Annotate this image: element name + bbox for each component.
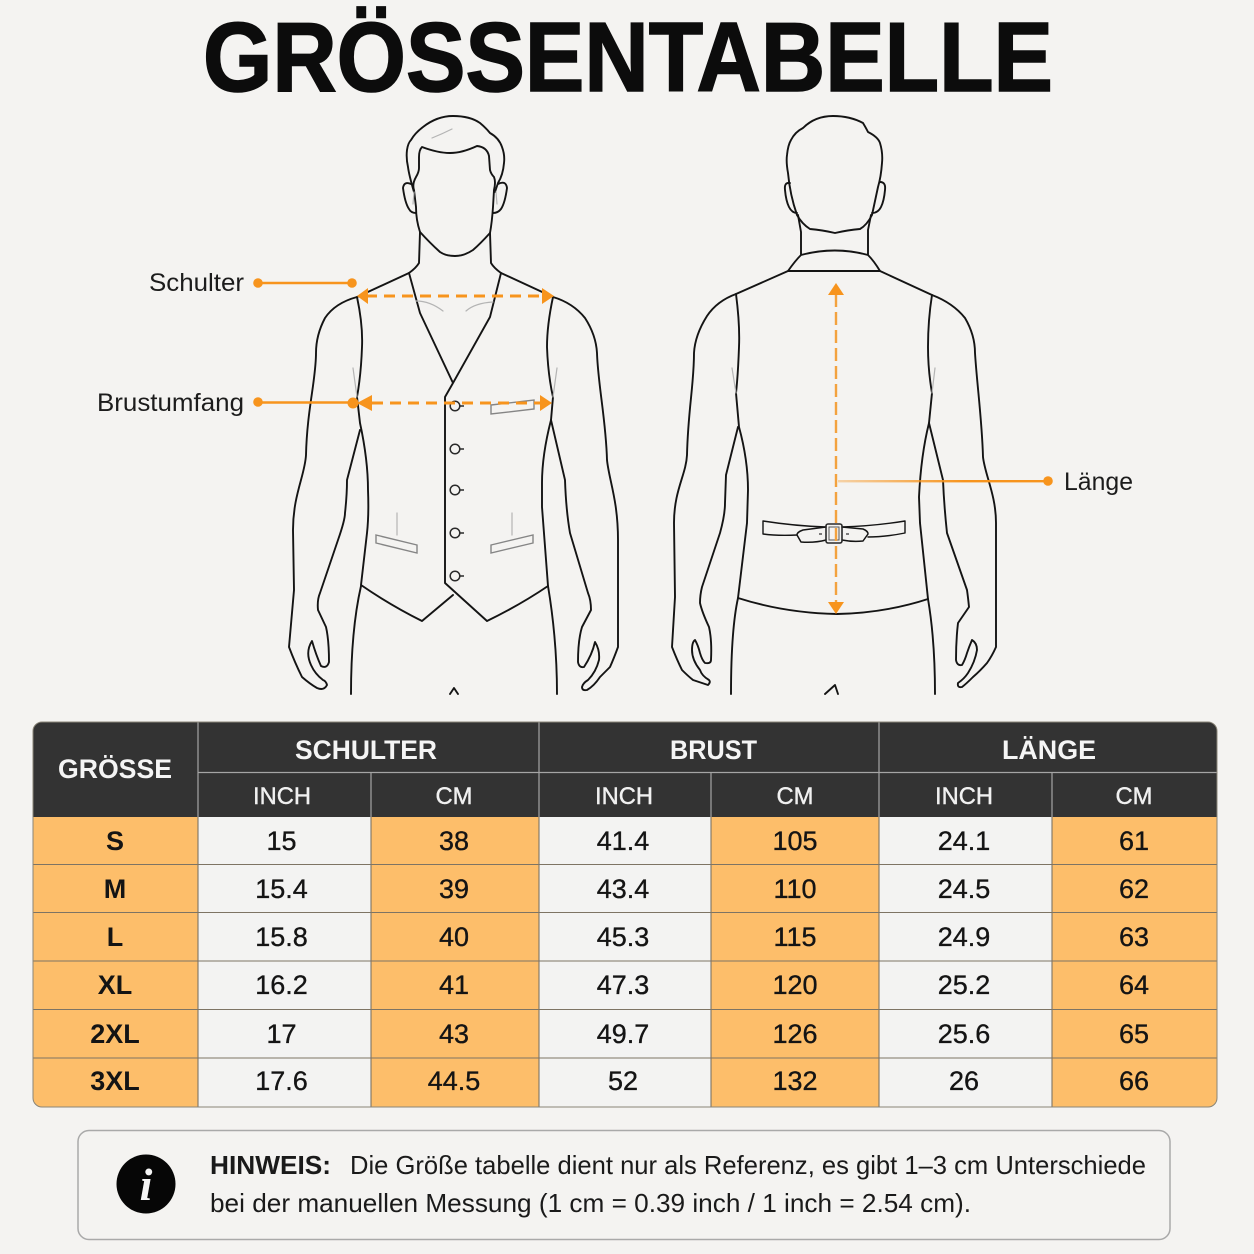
row M: M (104, 874, 126, 904)
table header: CM (436, 783, 472, 810)
vest outline (357, 273, 553, 621)
ears (403, 183, 507, 213)
face outline (413, 146, 495, 256)
collar creases (353, 301, 557, 535)
row S: 105 (772, 826, 818, 856)
row 2XL: 2XL (90, 1019, 140, 1049)
row XL (98, 975, 1148, 994)
table header: GRÖSSE (58, 754, 172, 784)
back of head (787, 116, 882, 233)
row L: L (107, 922, 123, 952)
row S: 61 (1119, 826, 1149, 856)
row L: 63 (1119, 922, 1149, 952)
icon: info (116, 1154, 176, 1214)
size table (33, 722, 1217, 1107)
row L: 40 (439, 922, 469, 952)
label: Brustumfang: Brustumfang (97, 389, 244, 417)
row 2XL: 25.6 (938, 1019, 990, 1049)
arrow: length (828, 283, 844, 614)
table cell backgrounds (33, 817, 1217, 1107)
table header: SCHULTER (295, 735, 437, 765)
table header (33, 722, 1217, 817)
hair details (413, 129, 497, 204)
row 2XL (91, 1024, 1148, 1044)
row 3XL: 3XL (90, 1066, 140, 1096)
back right arm (880, 271, 996, 687)
label: Länge: Länge (1064, 468, 1133, 496)
right arm (501, 273, 618, 690)
row XL: 120 (772, 970, 818, 1000)
table header: CM (776, 783, 814, 810)
vest buttons (450, 401, 464, 581)
row M (106, 879, 1148, 898)
table header: CM (1116, 783, 1152, 810)
row S: 24.1 (938, 826, 990, 856)
row M: 24.5 (938, 874, 990, 904)
row L: 115 (773, 922, 817, 952)
row XL: 64 (1119, 970, 1149, 1000)
figure: back view with vest (672, 116, 996, 694)
ears back (785, 182, 885, 213)
title: GRÖSSENTABELLE (203, 2, 1053, 112)
row L: 15.8 (255, 922, 308, 952)
leader line: Länge (838, 476, 1053, 486)
leader line: Brustumfang (253, 397, 358, 408)
row 3XL: 17.6 (255, 1066, 308, 1096)
figure: front view with vest (289, 116, 618, 694)
row 2XL: 126 (772, 1019, 818, 1049)
row 3XL: 132 (772, 1066, 818, 1096)
neck and collar (788, 215, 880, 271)
row 2XL: 49.7 (597, 1019, 649, 1049)
row M: 62 (1119, 874, 1149, 904)
row 3XL: 26 (949, 1066, 979, 1096)
note text: bei der manuellen Messung (1 cm = 0.39 inch / 1 inch = 2.54 cm). (210, 1188, 971, 1218)
row L (108, 927, 1148, 946)
row M: 43.4 (597, 874, 649, 904)
arrow: shoulder width (357, 288, 554, 304)
row S (106, 831, 1148, 850)
table header: INCH (595, 783, 653, 810)
row 3XL: 66 (1119, 1066, 1149, 1096)
back belt (763, 521, 905, 543)
row M: 15.4 (255, 874, 308, 904)
row 2XL: 17 (266, 1019, 297, 1049)
back vest outline (736, 294, 932, 614)
row XL: 41 (439, 970, 469, 1000)
note text (210, 1150, 1146, 1218)
table header: BRUST (670, 735, 757, 765)
row 2XL: 43 (439, 1019, 469, 1049)
trousers (351, 586, 557, 694)
row M: 39 (439, 874, 469, 904)
table header: INCH (253, 783, 311, 810)
row S: S (106, 826, 124, 856)
back creases (732, 368, 935, 393)
back left arm (672, 271, 788, 685)
leader line: Schulter (253, 278, 357, 288)
left arm (289, 273, 409, 689)
back trousers (731, 598, 935, 694)
row XL: 16.2 (255, 970, 308, 1000)
row M: 110 (773, 874, 817, 904)
note text: Die Größe tabelle dient nur als Referenz, es gibt 1–3 cm Unterschiede (350, 1150, 1146, 1180)
row S: 38 (439, 826, 469, 856)
row L: 24.9 (938, 922, 990, 952)
neck (409, 232, 501, 273)
row XL: 47.3 (597, 970, 649, 1000)
label: Schulter: Schulter (149, 269, 244, 297)
table header: LÄNGE (1002, 735, 1096, 765)
row 2XL: 65 (1119, 1019, 1149, 1049)
row XL: 25.2 (938, 970, 990, 1000)
table header: INCH (935, 783, 993, 810)
row S: 41.4 (597, 826, 649, 856)
vest pockets (376, 400, 534, 553)
row 3XL (90, 1071, 1148, 1090)
note text: HINWEIS: (210, 1150, 331, 1180)
row 3XL: 44.5 (428, 1066, 480, 1096)
arrow: chest width (357, 395, 552, 411)
row 3XL: 52 (608, 1066, 638, 1096)
hair and head outline (407, 116, 504, 192)
row XL: XL (98, 970, 132, 1000)
icon: info: i (140, 1159, 153, 1210)
note box (78, 1130, 1170, 1240)
row L: 45.3 (597, 922, 649, 952)
row S: 15 (266, 826, 297, 856)
